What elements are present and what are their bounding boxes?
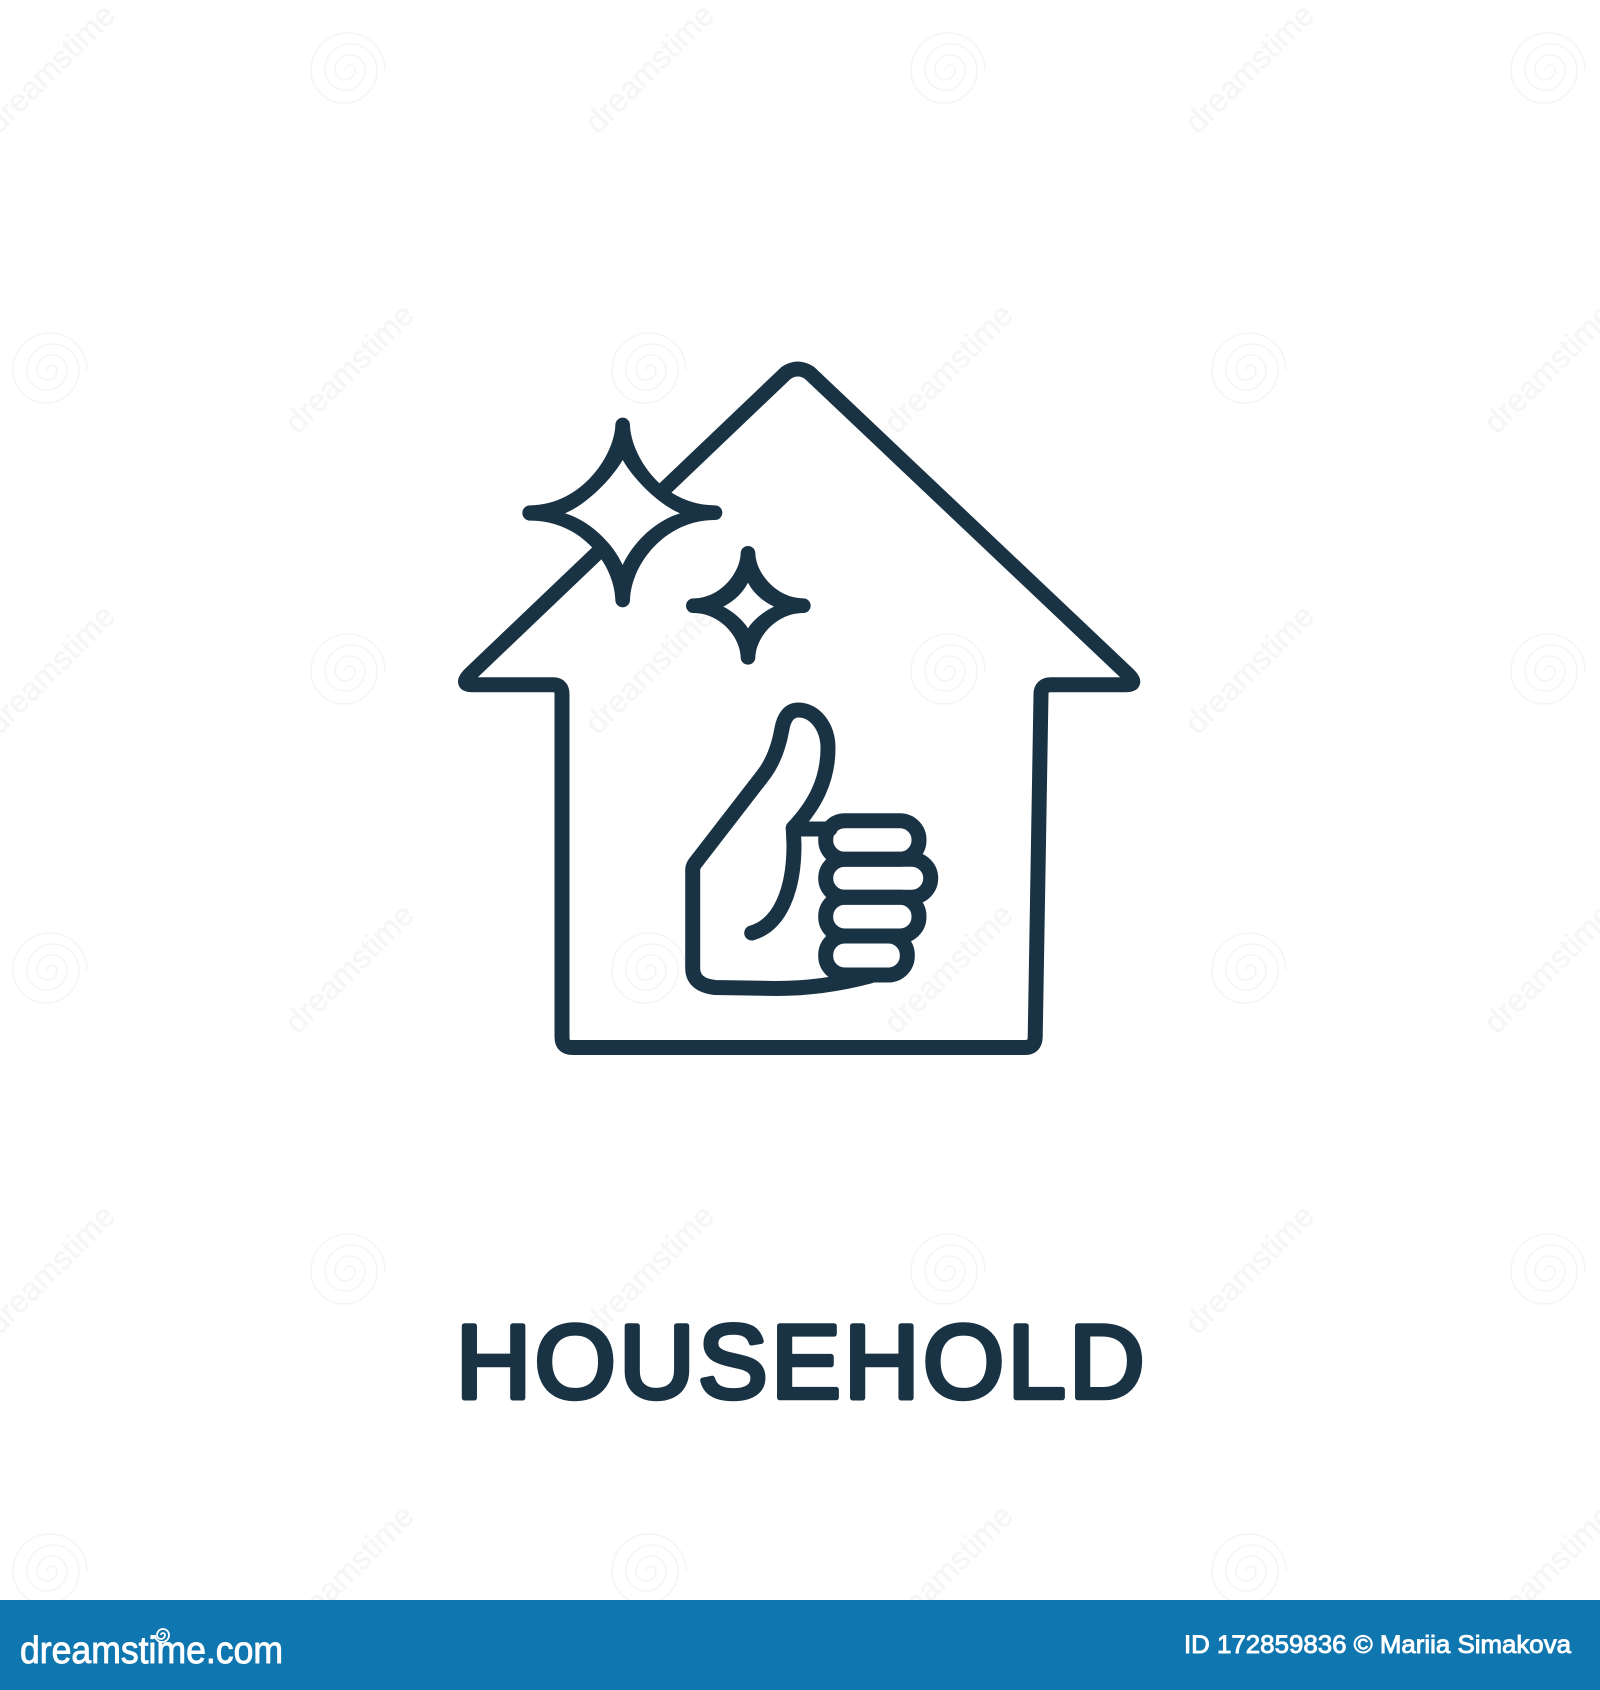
watermark pattern: dreamstime [876, 1497, 1020, 1641]
watermark pattern: dreamstime [1177, 597, 1321, 741]
image credit: ID 172859836 © Mariia Simakova [1184, 1631, 1571, 1659]
watermark pattern: dreamstime [1177, 1197, 1321, 1341]
watermark pattern: dreamstime [577, 0, 721, 140]
watermark pattern: dreamstime [577, 597, 721, 741]
watermark pattern: dreamstime [577, 1197, 721, 1341]
watermark pattern: dreamstime [1177, 0, 1321, 140]
watermark pattern: dreamstime [277, 896, 421, 1040]
title: HOUSEHOLD [456, 1304, 1148, 1420]
icon: large sparkle [522, 418, 722, 607]
watermark pattern: dreamstime [876, 896, 1020, 1040]
icon: house with sparkles and thumbs up [465, 369, 1133, 1048]
logo: dreamstime: dreamstime.com [20, 1630, 283, 1672]
footer banner [0, 1600, 1600, 1690]
watermark pattern: dreamstime [277, 296, 421, 440]
icon: house outline [465, 369, 1133, 1048]
icon: small sparkle [686, 546, 811, 665]
watermark pattern: dreamstime [876, 296, 1020, 440]
watermark pattern: dreamstime [277, 1497, 421, 1641]
icon: thumbs up hand [693, 710, 931, 988]
